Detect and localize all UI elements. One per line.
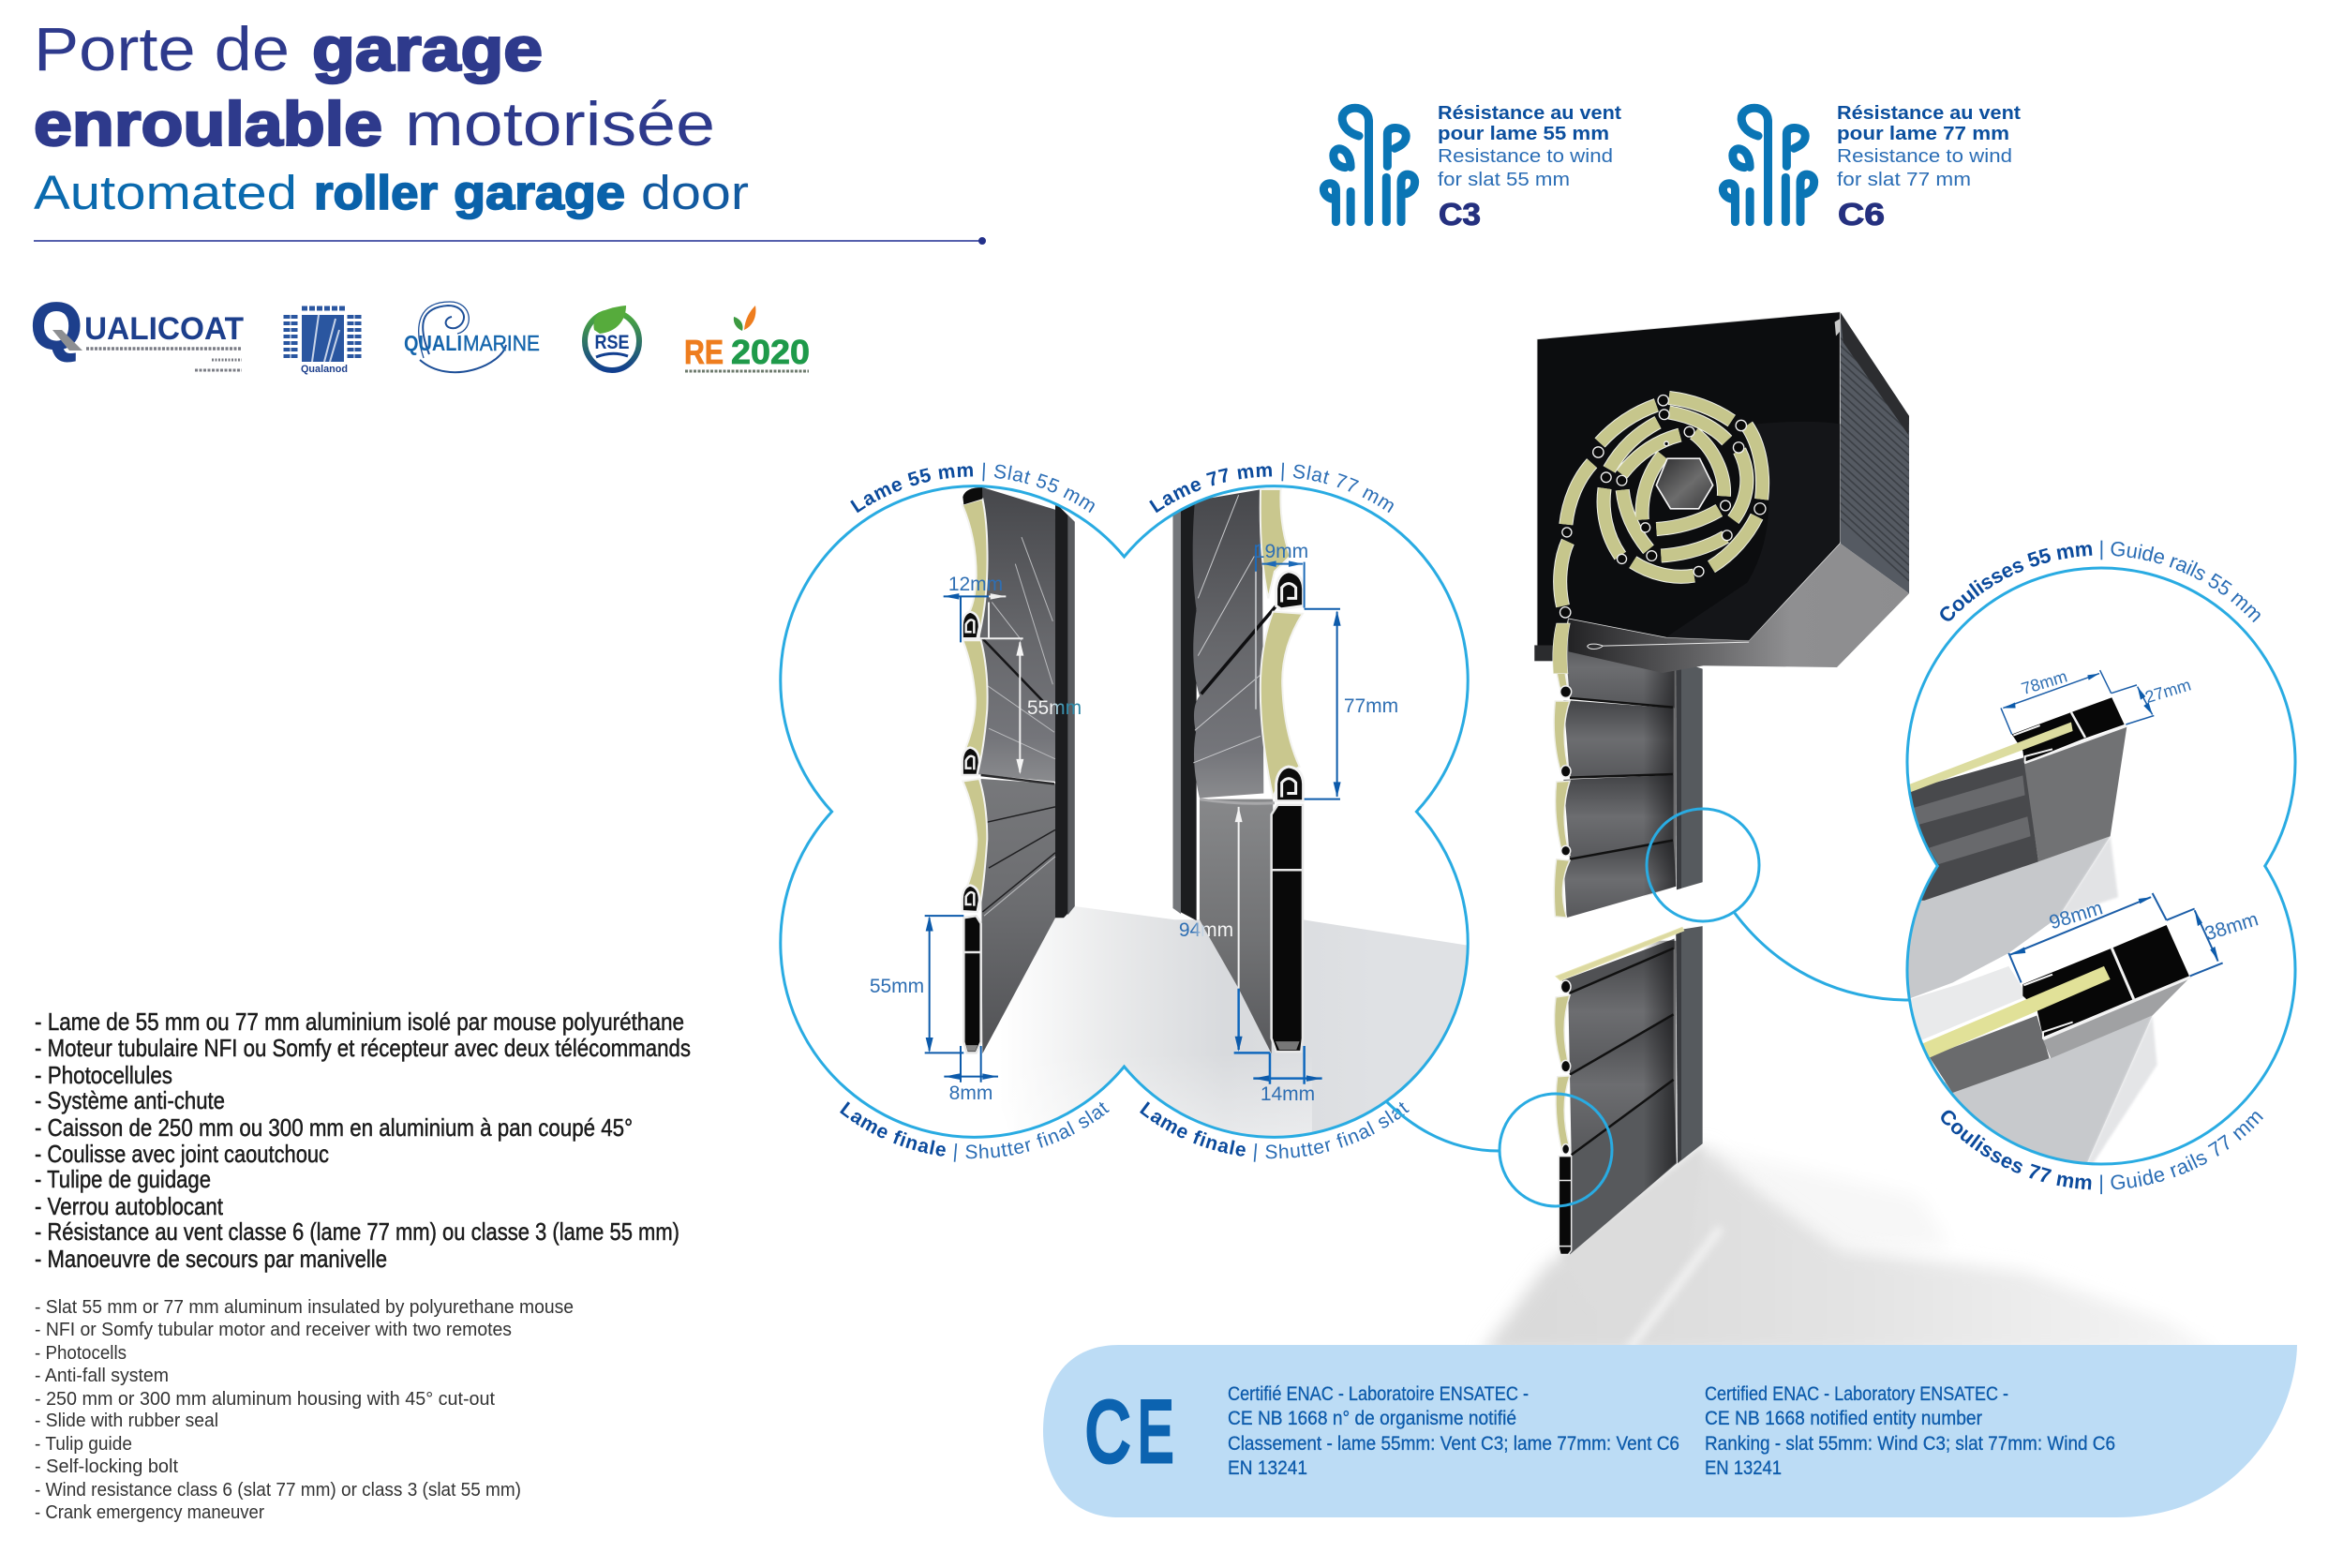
- logo: Qualimarine: [404, 302, 540, 372]
- panel shape: [1043, 1345, 2297, 1517]
- certification text French: [1228, 1383, 1679, 1479]
- title: [34, 14, 715, 158]
- rail dimension labels: 27mm: [2142, 675, 2193, 707]
- rail 77 guide face: [2043, 978, 2190, 1058]
- rail dimension lines: [2001, 670, 2223, 982]
- feature list French: - Système anti-chute: [35, 1086, 225, 1114]
- rail dimension labels: 38mm: [2202, 908, 2261, 945]
- shutter joints: [1560, 686, 1572, 1154]
- feature list English: - NFI or Somfy tubular motor and receiver with two remotes: [35, 1320, 512, 1340]
- title rule with end dot: [34, 237, 986, 245]
- curved label: rails 77: Coulisses 77 mm | Guide rails 77 mm: [1941, 1110, 2263, 1194]
- panel: slat sections quatrefoil: [779, 463, 1470, 1162]
- certification text English: CE NB 1668 notified entity number: [1705, 1408, 1982, 1429]
- dimension arrowheads: [926, 560, 1341, 1082]
- icon: wind C3: [1323, 108, 1415, 222]
- rail 55 slat: [1903, 757, 2038, 901]
- panel: guide rails: [1905, 540, 2297, 1194]
- rail floor shadow top: [1900, 836, 2118, 1040]
- text: wind resistance slat 77: Resistance to wind: [1837, 146, 2012, 167]
- text: wind resistance slat 77: for slat 77 mm: [1837, 170, 1971, 190]
- dimension labels: 55mm: [870, 976, 924, 997]
- logo: RE 2020: [684, 306, 810, 371]
- text: wind resistance slat 55: for slat 55 mm: [1438, 170, 1570, 190]
- slat 77 final section: [1272, 805, 1303, 1052]
- feature list French: - Caisson de 250 mm ou 300 mm en aluminium à pan coupé 45°: [35, 1113, 633, 1142]
- logo: RE 2020: RE: [684, 333, 724, 371]
- text: wind resistance slat 55: Résistance au vent: [1438, 103, 1621, 124]
- icon: wind C6: [1723, 108, 1814, 222]
- feature list English: - Crank emergency maneuver: [35, 1502, 264, 1523]
- garage door: shutter panels: [1554, 620, 1703, 1255]
- wind block C6: [1723, 103, 2021, 231]
- title: motorisée: [405, 89, 715, 158]
- title: garage: [312, 14, 543, 83]
- dimension labels: [870, 541, 1398, 1105]
- CE mark: C: [1085, 1384, 1130, 1480]
- logo: Qualimarine: QUALI: [404, 331, 462, 355]
- logo: Qualicoat: [31, 290, 244, 370]
- slat 55 insulated section: [963, 487, 988, 910]
- slat 77 joints: [1276, 572, 1304, 801]
- feature list English: - Self-locking bolt: [35, 1456, 178, 1477]
- text: wind resistance slat 77: [1837, 103, 2021, 231]
- curved label: slat 55: Lame 55 mm | Slat 55 mm: [850, 463, 1095, 514]
- certification text French: CE NB 1668 n° de organisme notifié: [1228, 1408, 1516, 1429]
- slat cross-section drawings: [906, 487, 1474, 1145]
- guide rail drawings: [1900, 670, 2223, 1163]
- upper section edge: [1554, 620, 1570, 918]
- detail circles and connectors: [1387, 809, 1909, 1206]
- garage door: housing: [1534, 312, 1909, 674]
- guide rail upper: [1676, 661, 1703, 889]
- text: wind resistance slat 55: [1438, 103, 1621, 231]
- slat 55 panel: [977, 487, 1075, 1053]
- certification text English: Certified ENAC - Laboratory ENSATEC -: [1705, 1383, 2008, 1405]
- certification text French: Certifié ENAC - Laboratoire ENSATEC -: [1228, 1383, 1529, 1405]
- garage door floor shadow: [1481, 1145, 2221, 1354]
- slat 77 insulated section: [1261, 489, 1303, 798]
- feature list English: - Slat 55 mm or 77 mm aluminum insulated by polyurethane mouse: [35, 1297, 574, 1318]
- subtitle: garage: [454, 166, 625, 219]
- text: wind resistance slat 55: Resistance to wind: [1438, 146, 1613, 167]
- dimension labels: 55mm: [1027, 697, 1082, 719]
- dimension labels: 94mm: [1179, 919, 1233, 941]
- housing black face: [1534, 312, 1840, 661]
- feature list English: - Tulip guide: [35, 1434, 132, 1455]
- dimension labels: 14mm: [1261, 1083, 1315, 1105]
- feature list French: [35, 1008, 691, 1273]
- rail arrowheads: [2003, 674, 2218, 962]
- rail dimension labels: 98mm: [2047, 897, 2105, 933]
- dimension lines: [925, 545, 1340, 1084]
- rail 77 slat: [1929, 1016, 2050, 1093]
- text: wind resistance slat 55: pour lame 55 mm: [1438, 124, 1609, 144]
- feature list French: - Coulisse avec joint caoutchouc: [35, 1140, 329, 1168]
- feature list French: - Tulipe de guidage: [35, 1165, 211, 1193]
- certification text English: [1705, 1383, 2115, 1479]
- certification text French: EN 13241: [1228, 1457, 1307, 1479]
- rail dimension labels: [2019, 666, 2261, 945]
- feature list English: [35, 1297, 574, 1523]
- top slat section under housing: [1553, 623, 1570, 674]
- lower section edge: [1554, 927, 1684, 1255]
- text: wind resistance slat 77: pour lame 77 mm: [1837, 124, 2009, 144]
- feature list French: - Résistance au vent classe 6 (lame 77 mm) ou classe 3 (lame 55 mm): [35, 1217, 679, 1246]
- text: wind resistance slat 77: Résistance au vent: [1837, 103, 2021, 124]
- rail floor shadow bottom: [1933, 1016, 2157, 1163]
- shutter upper slats: [1563, 627, 1676, 918]
- housing side grille: [1840, 312, 1909, 593]
- feature list French: - Moteur tubulaire NFI ou Somfy et récepteur avec deux télécommands: [35, 1034, 691, 1062]
- certification text English: EN 13241: [1705, 1457, 1782, 1479]
- logo: blue square label: [287, 308, 358, 375]
- curved label: slat 77: Lame 77 mm | Slat 77 mm: [1149, 463, 1394, 514]
- rail 77 section: [1915, 925, 2191, 1060]
- text: wind resistance slat 55: C3: [1439, 197, 1481, 231]
- feature list English: - Wind resistance class 6 (slat 77 mm) or class 3 (slat 55 mm): [35, 1480, 521, 1501]
- feature list English: - Anti-fall system: [35, 1366, 169, 1386]
- rail 55 section: [1903, 697, 2127, 795]
- hexagonal axle: [1656, 458, 1713, 509]
- logo: blue square label: Qualanod: [301, 364, 348, 375]
- logo: RSE: [585, 306, 639, 370]
- certification text French: Classement - lame 55mm: Vent C3; lame 77mm: Vent C6: [1228, 1433, 1679, 1455]
- title: Porte de: [34, 14, 290, 83]
- curved label: rails 55: Coulisses 55 mm | Guide rails 55 mm: [1940, 540, 2261, 622]
- subtitle: roller: [314, 166, 438, 219]
- feature list French: - Manoeuvre de secours par manivelle: [35, 1245, 387, 1273]
- CE mark: E: [1138, 1384, 1173, 1480]
- housing underside: [1569, 544, 1909, 673]
- curved label: final slat 55: Lame finale | Shutter final slat: [840, 1101, 1110, 1162]
- rail 55 guide face: [2024, 726, 2127, 861]
- roll: slat outline: [1560, 398, 1763, 606]
- wind block C3: [1323, 103, 1621, 231]
- feature list French: - Verrou autoblocant: [35, 1192, 224, 1220]
- roll: slat joints: [1560, 396, 1766, 618]
- feature list English: - 250 mm or 300 mm aluminum housing with 45° cut-out: [35, 1389, 495, 1410]
- feature list French: - Lame de 55 mm ou 77 mm aluminium isolé par mouse polyuréthane: [35, 1008, 684, 1036]
- feature list French: - Photocellules: [35, 1061, 172, 1089]
- logo: RE 2020: 2020: [731, 333, 810, 371]
- dimension labels: 77mm: [1344, 695, 1398, 717]
- logo: RSE: RSE: [594, 332, 630, 353]
- guide rail lower: [1676, 926, 1703, 1163]
- dimension labels: 19mm: [1254, 541, 1308, 562]
- slat 77 panel: [1173, 489, 1276, 1053]
- floor: [1041, 906, 1467, 1136]
- feature list English: - Photocells: [35, 1343, 127, 1364]
- subtitle: door: [641, 166, 749, 219]
- title: enroulable: [34, 89, 382, 158]
- slat 55 final section: [963, 916, 981, 1053]
- subtitle: Automated: [34, 166, 297, 219]
- roll: insulated foam: [1560, 398, 1763, 606]
- rail dimension labels: 78mm: [2019, 666, 2069, 698]
- subtitle: [34, 166, 749, 219]
- quatrefoil outline: [781, 486, 1468, 1137]
- logo: Qualicoat: Q: [31, 290, 82, 363]
- figure-eight outline: [1907, 568, 2295, 1164]
- text: wind resistance slat 77: C6: [1838, 197, 1885, 231]
- slat 55 joints: [963, 612, 979, 912]
- certification text English: Ranking - slat 55mm: Wind C3; slat 77mm: Wind C6: [1705, 1433, 2115, 1455]
- curved label: final slat 77: Lame finale | Shutter final slat: [1140, 1101, 1410, 1162]
- dimension labels: 12mm: [948, 574, 1003, 595]
- logo: Qualicoat: UALICOAT: [84, 311, 244, 347]
- hook lip: [1588, 642, 1749, 649]
- logo: Qualimarine: MARINE: [463, 331, 540, 355]
- shutter lower slats: [1562, 938, 1677, 1255]
- panel: CE certification: [1043, 1345, 2297, 1517]
- dimension labels: 8mm: [949, 1083, 992, 1104]
- feature list English: - Slide with rubber seal: [35, 1411, 218, 1431]
